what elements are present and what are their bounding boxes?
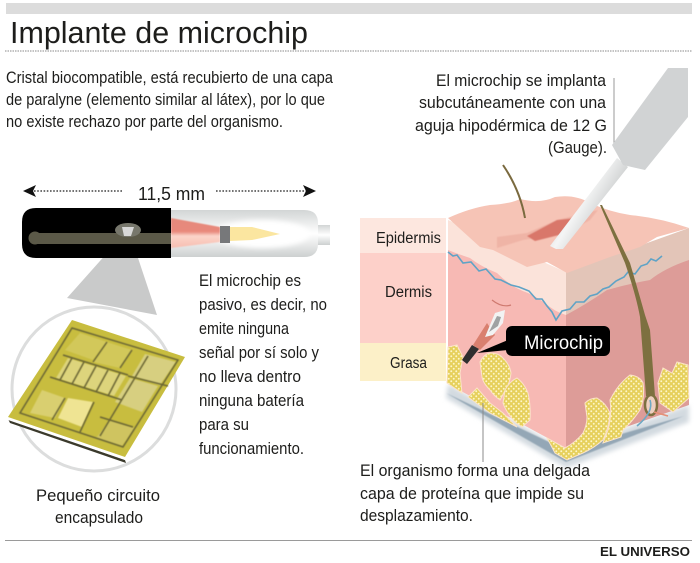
passive chip text: señal por sí solo y [199, 344, 320, 362]
wire end [28, 232, 42, 244]
wire [36, 233, 171, 244]
skin block cross-section [446, 165, 689, 468]
source credit: EL UNIVERSO [600, 545, 690, 559]
chip in capsule [115, 223, 141, 237]
needle shaft [550, 158, 628, 249]
passive chip text: funcionamiento. [199, 440, 304, 458]
capsule end cap [316, 225, 330, 245]
needle note: (Gauge). [548, 139, 607, 157]
grasa label: Grasa [390, 355, 427, 372]
incision [497, 210, 598, 248]
protein layer note: El organismo forma una delgada [360, 462, 591, 480]
block shadow [446, 384, 689, 468]
left hair [503, 165, 525, 218]
chip magnifier circle [12, 307, 176, 471]
protein layer note: desplazamiento. [360, 507, 473, 525]
microchip label: Microchip [524, 333, 603, 354]
needle note: aguja hipodérmica de 12 G [415, 117, 607, 135]
epidermis label: Epidermis [376, 230, 441, 247]
needle note [415, 72, 607, 157]
syringe and needle [550, 68, 688, 249]
syringe body [612, 68, 688, 170]
fat lobules [447, 345, 689, 460]
epidermis label [360, 218, 446, 253]
microchip capsule [22, 208, 330, 258]
needle note: El microchip se implanta [436, 72, 607, 90]
protein layer note [360, 462, 591, 525]
microchip label [477, 326, 610, 356]
intro text: Cristal biocompatible, está recubierto de una capa [6, 69, 334, 87]
yellow tip [230, 227, 280, 241]
epidermis right band [566, 228, 689, 315]
grasa label [360, 343, 446, 381]
right hair with follicle [600, 205, 668, 426]
dermis right face [566, 240, 689, 448]
implanted microchip in tissue [462, 300, 511, 364]
passive chip text: ninguna batería [199, 392, 305, 410]
top grey bar [6, 3, 692, 14]
zoom cone [67, 234, 157, 315]
epidermis left band [448, 220, 566, 315]
dermis label [360, 253, 446, 343]
intro text: de paralyne (elemento similar al látex), por lo que [6, 91, 325, 109]
title rule [5, 50, 692, 52]
dermis left face [448, 240, 566, 448]
intro text [6, 69, 334, 131]
chip cells [30, 333, 176, 446]
title: Implante de microchip [10, 15, 308, 50]
intro text: no existe rechazo por parte del organismo. [6, 113, 283, 131]
dimension arrows: 11,5 mm [23, 184, 316, 204]
chip caption: Pequeño circuito [36, 487, 160, 505]
passive chip text: no lleva dentro [199, 368, 301, 386]
needle note: subcutáneamente con una [419, 94, 607, 112]
passive chip text: para su [199, 416, 249, 434]
glass tube [171, 210, 318, 257]
passive chip text: pasivo, es decir, no [199, 296, 327, 314]
chip caption: encapsulado [55, 509, 143, 527]
skin top surface [448, 196, 689, 273]
layer legend [360, 218, 446, 381]
chip illustration [8, 320, 185, 463]
footer rule [5, 540, 692, 541]
black casing [22, 208, 171, 258]
passive chip text: emite ninguna [199, 320, 290, 338]
leader line to tissue [482, 403, 484, 462]
passive chip text [199, 272, 327, 458]
dermis label: Dermis [385, 284, 432, 301]
passive chip text: El microchip es [199, 272, 301, 290]
dimension arrows: 11,5 mm: 11,5 mm [138, 184, 205, 204]
metal collar [220, 226, 230, 243]
protein layer note: capa de proteína que impide su [360, 485, 584, 503]
blue basal membrane line [448, 252, 662, 320]
antenna cone [171, 218, 220, 248]
leader line [613, 78, 615, 146]
chip caption [36, 487, 160, 527]
